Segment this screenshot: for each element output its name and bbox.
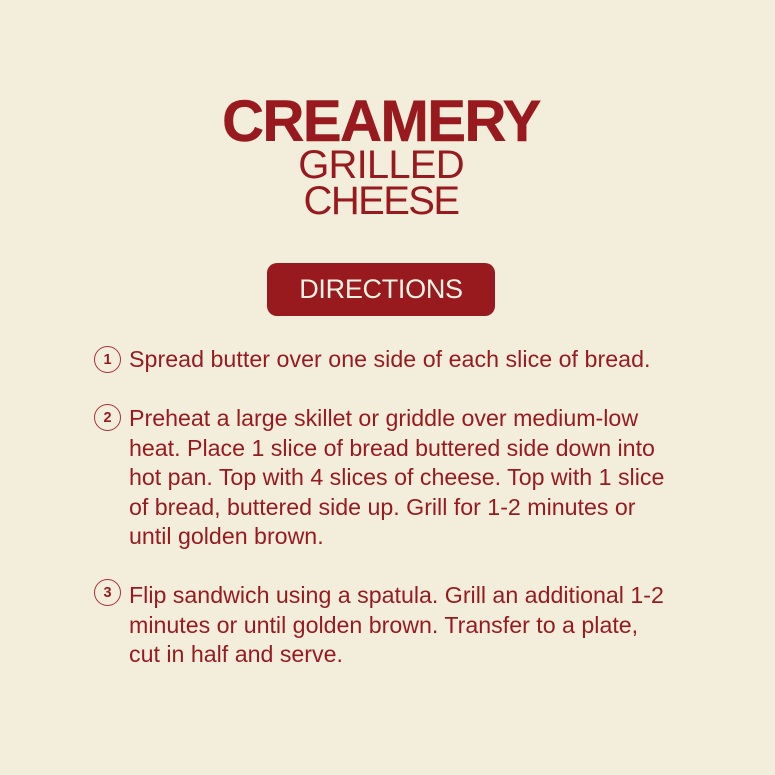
step 2 text: of bread, buttered side up. Grill for 1-2 minutes or <box>129 494 636 520</box>
step 2 number <box>94 404 121 431</box>
step 1 number: 1 <box>103 352 112 368</box>
step 3 text: minutes or until golden brown. Transfer to a plate, <box>129 612 638 638</box>
step 1 <box>94 346 651 373</box>
step 2 text: until golden brown. <box>129 523 324 549</box>
title: creamery: CREAMERY <box>222 89 540 154</box>
title: cheese: CHEESE <box>304 179 458 223</box>
step 3 number <box>94 579 121 606</box>
title <box>222 89 541 223</box>
step 3 text <box>129 582 664 667</box>
step 3 number: 3 <box>103 585 112 601</box>
step 1 text: Spread butter over one side of each slice of bread. <box>129 346 651 372</box>
step 3 text: cut in half and serve. <box>129 641 343 667</box>
step 2 text: heat. Place 1 slice of bread buttered side down into <box>129 434 655 460</box>
step 2 text: Preheat a large skillet or griddle over medium-low <box>129 405 638 431</box>
title: grilled: GRILLED <box>298 143 464 187</box>
step 2 text: hot pan. Top with 4 slices of cheese. Top with 1 slice <box>129 464 664 490</box>
directions badge <box>267 263 495 316</box>
step 3 text: Flip sandwich using a spatula. Grill an additional 1-2 <box>129 582 664 608</box>
step 2 <box>94 404 664 549</box>
step 2 number: 2 <box>103 410 112 426</box>
step 2 text <box>129 405 664 549</box>
step 3 <box>94 579 664 667</box>
directions badge: DIRECTIONS <box>299 274 463 304</box>
step 1 number <box>94 346 121 373</box>
